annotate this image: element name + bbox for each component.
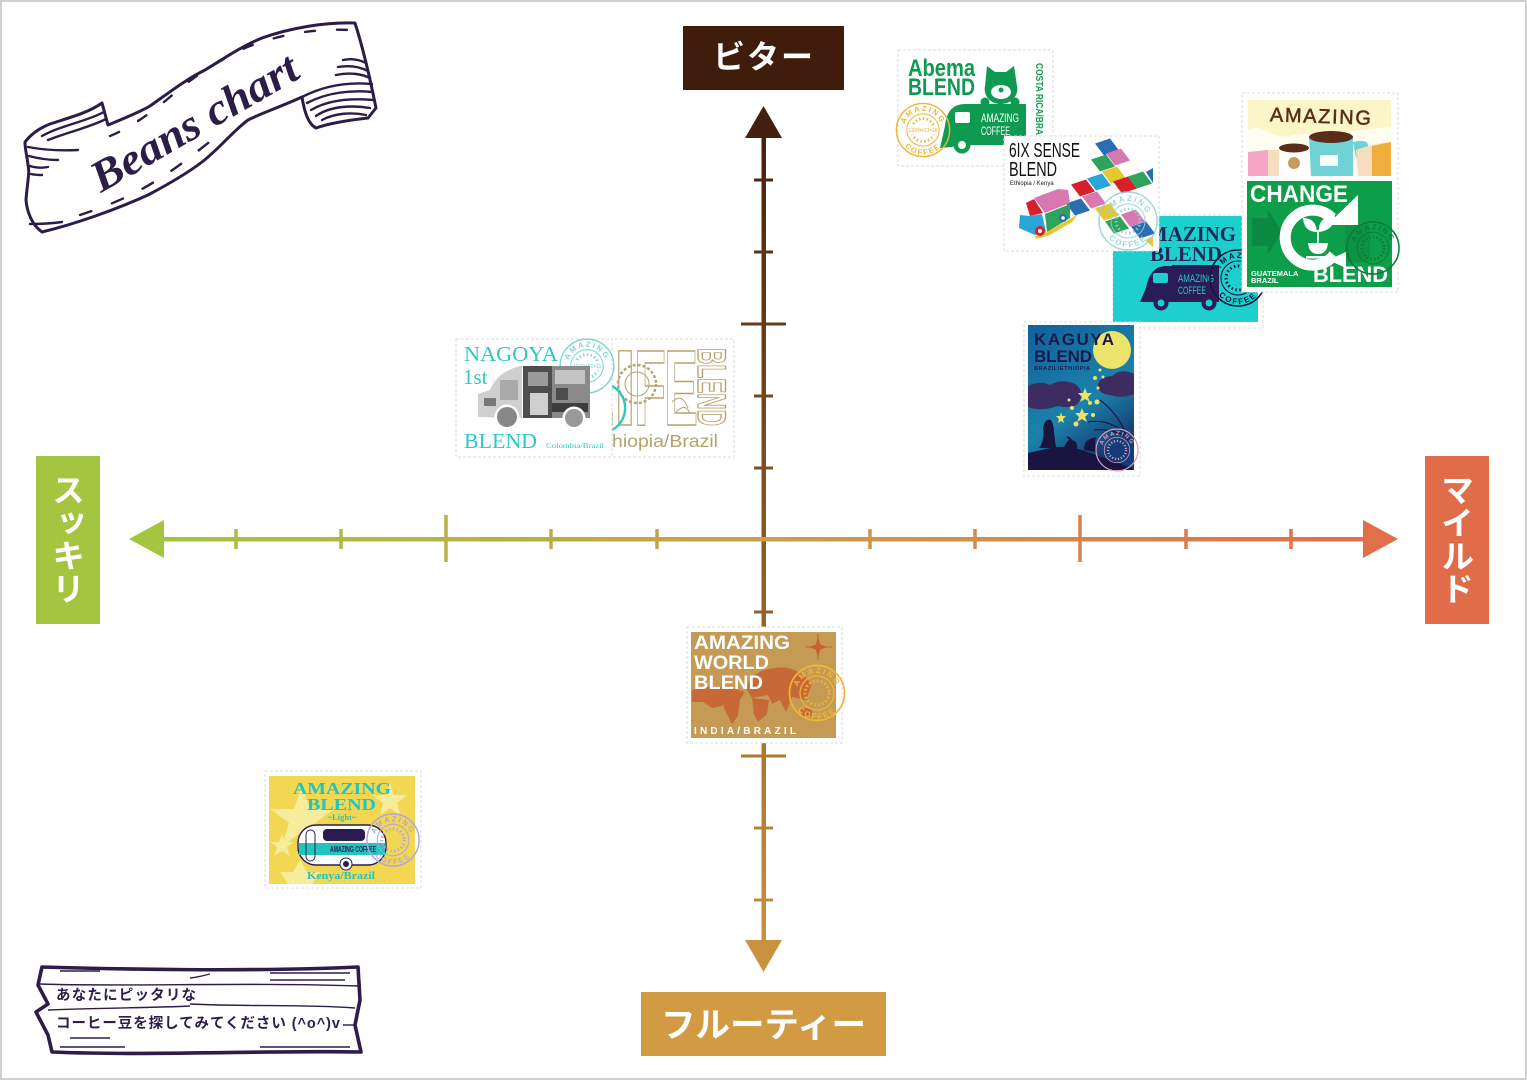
green panel: GUATEMALA [1251,269,1299,278]
postmark [1095,428,1139,472]
background stars [270,783,407,884]
label: mild: マイルド [1436,473,1474,605]
postmark: AMAZING [1104,195,1150,214]
horizontal axis: clean to mild [129,515,1398,562]
stamp: Amazing World Blend: AMAZING [694,633,790,654]
icon: dog mascot [980,66,1020,106]
postmark: 1998▪03▪18 [908,128,938,134]
stamp: Amazing Blend Light: BLEND [307,795,376,814]
postmark: COFFEE [798,708,835,719]
stamp: Kaguya Blend: BLEND [1034,347,1092,366]
stamp: Life Blend: F [634,327,666,448]
stamp: Nagoya 1st Blend: NAGOYA [464,342,559,366]
stamp: Life Blend: I [613,327,637,448]
stamp: Amazing Blend Light: Kenya/Brazil [307,870,375,882]
postmark [1098,191,1158,251]
stamp: Amazing Blend teal: BLEND [1150,242,1222,266]
label: bitter [683,26,844,90]
label: bitter: ビター [713,39,815,75]
stamp: Amazing Blend Light [264,770,422,888]
stamp: Amazing World Blend: INDIA/BRAZIL [694,726,796,737]
stamp: Kaguya Blend [1024,322,1141,476]
postmark [1209,249,1264,307]
stamp: Life Blend: E [664,327,698,448]
stamp: Kaguya Blend: BRAZIL/ETHIOPIA [1034,366,1091,372]
postmark: AMAZING [1100,430,1134,446]
label: clean [36,456,100,624]
postmark: AMAZING [794,668,840,686]
postmark: AMAZING [372,816,414,834]
wooden sign with message: あなたにピッタリな [56,987,196,1004]
postmark: 2023▪10▪11 [572,364,602,370]
stamp: Amazing Blend Light: AMAZING [293,779,391,798]
icon: photo collage truck [478,366,590,430]
stamp: Kaguya Blend: KAGUYA [1034,330,1114,349]
postmark: COFFEE [906,144,940,155]
label: clean: スッキリ [48,473,84,605]
stamp: Abema Blend: COSTA RICA/BRA [1033,63,1044,135]
stamp: 6IX Sense Blend: BLEND [1009,159,1057,181]
postmark: COFFEE [1220,292,1256,304]
illustration: two mugs: AMAZING [1270,104,1371,130]
stars [1056,368,1104,426]
icon: green truck: AMAZING [981,111,1019,125]
postmark [366,813,420,867]
postmark: AMAZING [1215,252,1242,272]
postmark [896,102,950,158]
stamp: Change Blend [1241,92,1400,292]
label: fruity: フルーティー [661,1007,866,1045]
teal postmark edge [610,385,625,430]
stamp: Amazing World Blend: WORLD [694,653,769,674]
stamp: Nagoya 1st Blend: BLEND [464,429,537,453]
title ribbon: Beans chart [25,23,376,232]
icon: airstream trailer: AMAZING COFFEE [330,845,376,854]
icon: green truck [940,104,1026,154]
silhouettes [1028,447,1134,470]
clouds [1028,371,1134,409]
postmark: AMAZING [901,106,944,124]
label: mild [1425,456,1489,624]
green panel [1247,181,1392,287]
postmark: COFFEE [1110,236,1146,248]
stamp: Amazing World Blend: BLEND [694,673,763,694]
postmark [1346,221,1400,275]
postmark: COFFEE [376,854,410,864]
postmark: AMAZING [564,341,608,360]
stamp: Abema Blend: BLEND [908,74,975,101]
vertical axis: bitter to fruity [741,106,786,972]
icon: airstream trailer [298,825,386,870]
icon: navy truck [1140,265,1219,310]
sunflower ornament [618,365,690,414]
title ribbon: Beans chart: Beans chart [81,42,309,202]
stamp: Amazing Blend Light: ~Light~ [328,812,357,822]
postmark [559,338,615,394]
stamp: Abema Blend [896,50,1054,166]
green panel: BLEND [1313,262,1388,287]
world map [692,667,812,724]
stamp: Life Blend: hiopia/Brazil [612,431,718,451]
icon: colorful bus [1019,189,1078,239]
stamp: Nagoya 1st Blend: 1st [463,365,488,389]
green panel: CHANGE [1250,181,1348,208]
stamp: 6IX Sense Blend: 6IX SENSE [1009,140,1080,162]
illustration: two mugs [1248,100,1391,176]
stamp: Amazing Blend teal: AMAZING [1133,222,1236,246]
wooden sign with message [36,967,361,1053]
wooden sign with message: コーヒー豆を探してみてください (^o^)v [56,1015,340,1032]
stamp: 6IX Sense Blend: Ethiopia / Kenya [1010,181,1054,187]
stamp: Life Blend: L [590,327,614,448]
stamp: Amazing Blend teal [1112,214,1264,328]
colored mosaic plane [1066,138,1155,247]
label: fruity [641,992,886,1056]
stamp: Nagoya 1st Blend [456,338,615,458]
icon: green truck: COFFEE [981,124,1010,138]
stamp: Life Blend: BLEND [689,348,733,426]
postmark: AMAZING [1352,224,1394,242]
icon: navy truck: COFFEE [1178,285,1206,297]
stamp: 6IX Sense Blend [1003,136,1160,252]
icon: navy truck: AMAZING [1178,273,1214,285]
postmark [788,664,846,722]
stamp: Nagoya 1st Blend: Colombia/Brazil [546,441,604,450]
stamp: Abema Blend: Abema [908,55,976,82]
green panel: BRAZIL [1251,276,1279,285]
stamp: Life Blend [585,327,734,457]
stamp: Amazing World Blend [686,626,846,744]
